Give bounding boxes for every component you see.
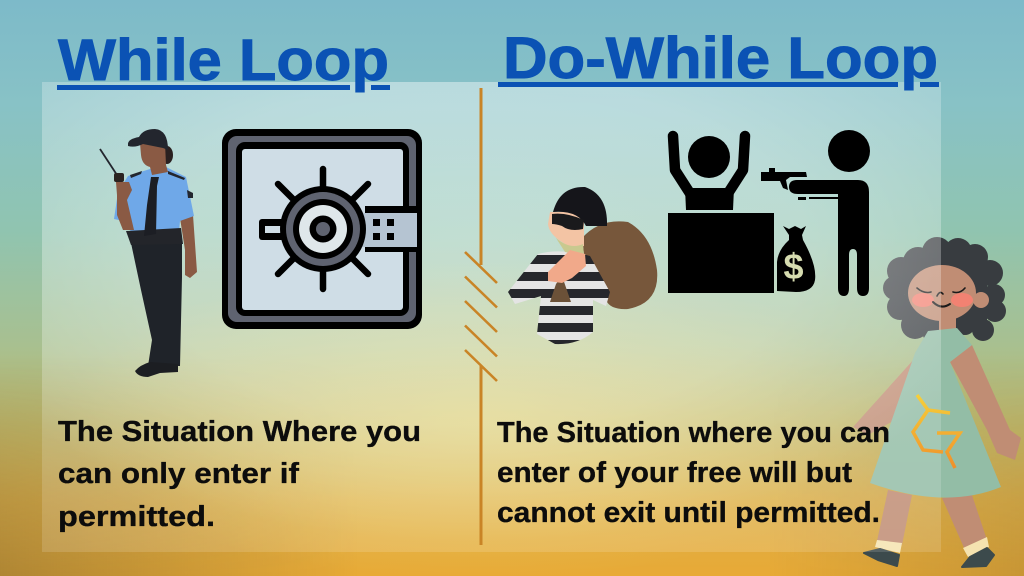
girl: far arm <box>853 358 918 435</box>
thief: torso and arms <box>508 251 610 344</box>
girl: socks <box>875 537 989 557</box>
pictogram: money bag: $ <box>783 246 804 287</box>
guard: epaulettes <box>130 171 193 198</box>
guard: tie <box>144 177 159 236</box>
safe: hinge bar <box>365 206 417 252</box>
guard: hair bun <box>161 146 173 164</box>
guard: cap <box>128 129 168 150</box>
thief: bag neck held in hands <box>550 276 571 302</box>
text: while loop description: The Situation Where you <box>58 416 421 448</box>
girl: cheeks <box>912 293 973 307</box>
thief: beanie <box>553 187 607 226</box>
pictogram: pistol <box>761 168 807 190</box>
thief: mask <box>552 214 584 230</box>
text: do-while loop description: The Situation where you can <box>497 417 890 449</box>
icon: vault safe <box>222 129 422 329</box>
pictogram: money bag <box>777 226 815 292</box>
pictogram: robber <box>789 130 870 296</box>
guard: radio <box>114 173 124 182</box>
girl: legs <box>877 490 987 550</box>
translucent content panel <box>42 82 941 552</box>
guard: radio antenna <box>100 149 117 175</box>
divider with break <box>465 88 497 545</box>
text: while loop description <box>58 416 421 533</box>
text: while loop description: can only enter if <box>58 458 299 490</box>
text: do-while loop description <box>497 417 890 529</box>
girl: facial features <box>917 288 965 307</box>
girl: dress <box>870 328 1001 498</box>
guard: trousers <box>131 240 182 366</box>
text: do-while loop description: cannot exit until permitted. <box>497 497 880 529</box>
guard: forearm and hand <box>116 182 134 230</box>
girl: shoes <box>864 548 994 567</box>
safe: keypad dots <box>373 219 394 240</box>
illustration: security guard <box>100 129 197 377</box>
heading: While Loop: While Loop <box>58 28 389 93</box>
guard: face and neck <box>140 143 168 175</box>
safe: dial rings <box>280 186 366 272</box>
pictogram: counter desk <box>668 213 774 293</box>
guard: shoes <box>135 362 178 377</box>
safe: dial spokes <box>278 169 368 289</box>
illustration: masked thief with sack <box>508 187 657 344</box>
text: while loop description: permitted. <box>58 501 215 533</box>
pictogram: victim <box>673 136 745 210</box>
girl: right arm <box>950 345 1021 460</box>
girl: neck, face and ear <box>908 265 989 332</box>
pictogram: robbery at a counter <box>668 130 870 296</box>
thief: hands <box>548 250 586 283</box>
text: do-while loop description: enter of your free will but <box>497 457 852 489</box>
girl: hair <box>883 237 1006 350</box>
heading: Do-While Loop: Do-While Loop <box>503 26 938 91</box>
guard: shirt <box>114 167 194 237</box>
safe: left handle <box>259 219 289 240</box>
logo: hexagonal G mark on dress <box>913 395 960 468</box>
thief: sack <box>582 221 657 309</box>
guard: belt <box>126 228 183 245</box>
illustration: walking girl <box>853 237 1021 567</box>
guard: far arm <box>180 215 197 278</box>
thief: face <box>548 212 584 247</box>
